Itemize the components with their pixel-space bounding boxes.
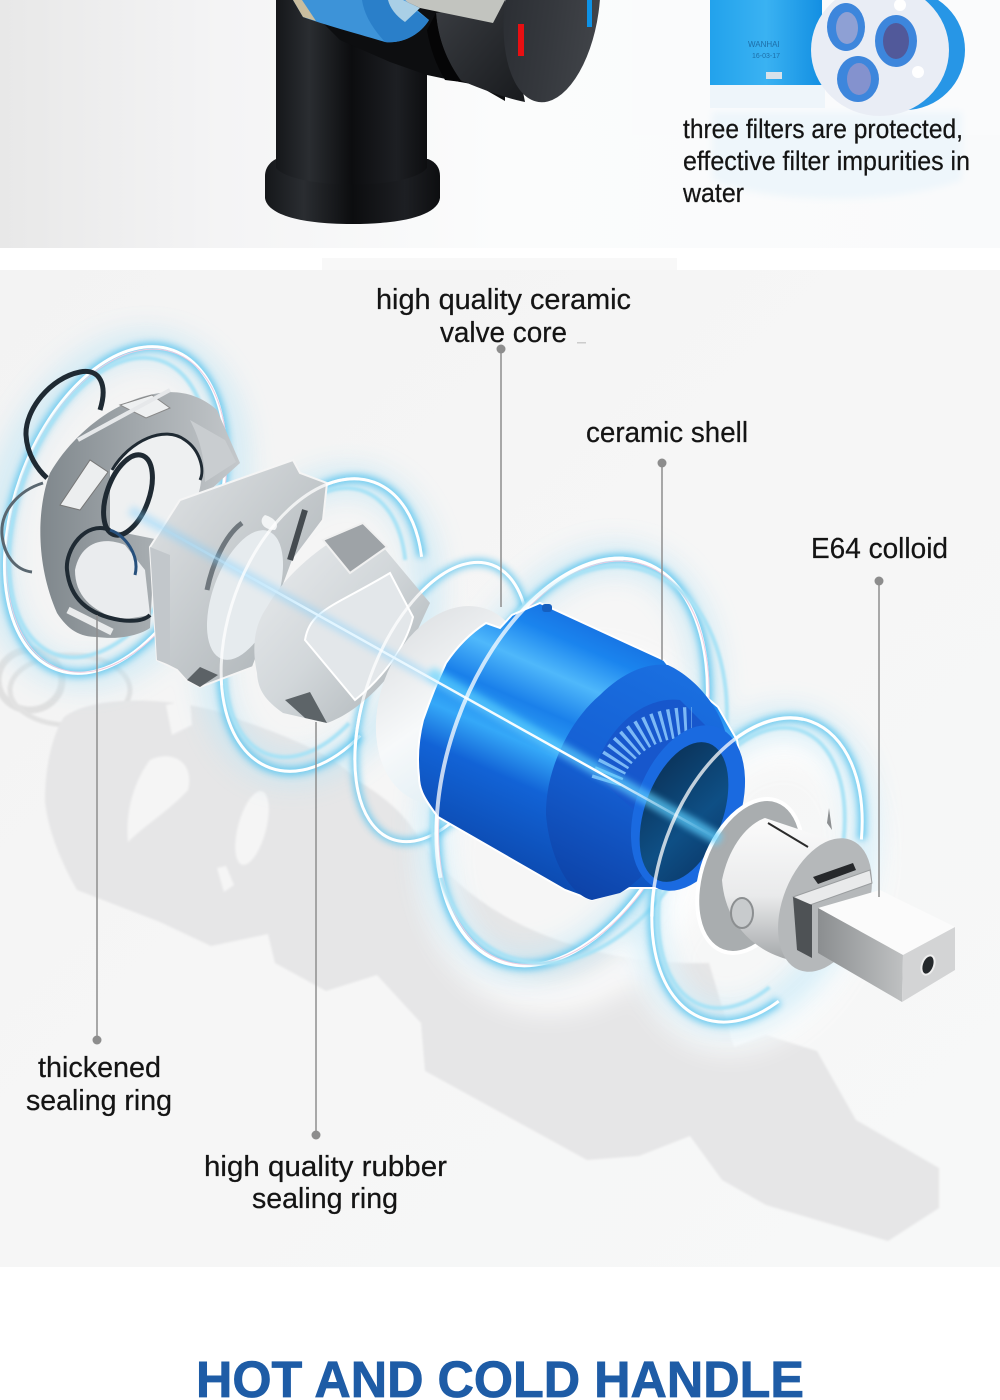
- ring glow behind parts: [0, 316, 901, 1051]
- label: high quality rubber sealing ring: sealing ring: [252, 1183, 398, 1215]
- bore rim: [610, 709, 766, 907]
- label: high quality ceramic valve core: [376, 284, 631, 349]
- column: [276, 0, 427, 184]
- square stem: [818, 890, 955, 955]
- translucent blue cartridge: [293, 0, 429, 42]
- rings in front of parts: [184, 451, 901, 1051]
- base: [265, 159, 440, 224]
- panel: faucet and filter cartridge: [0, 0, 1000, 248]
- shadow of parts: [0, 650, 939, 1241]
- leader: E64 colloid: [874, 576, 884, 897]
- elbow: [300, 0, 505, 101]
- part: slotted plate: [150, 460, 327, 687]
- label: high quality ceramic valve core: high quality ceramic: [376, 284, 631, 316]
- hot marker: [518, 24, 524, 56]
- text: filter description: effective filter impurities in: [683, 146, 970, 176]
- leader: high quality rubber sealing ring: [312, 722, 320, 1140]
- icon: ceramic cartridge with three filter holes: [632, 0, 1000, 199]
- text: filter description: water: [682, 178, 744, 208]
- panel: exploded cartridge diagram: [0, 258, 1000, 1267]
- icon: ceramic cartridge with three filter holes: WANHAI: [748, 40, 780, 49]
- text: filter description: three filters are protected,: [683, 114, 963, 144]
- part: thickened sealing ring holder: [2, 371, 240, 638]
- leader: thickened sealing ring: [92, 615, 102, 1044]
- glow halo around parts: [0, 312, 902, 1050]
- grey core: [403, 0, 505, 23]
- leader: ceramic shell: [658, 458, 666, 660]
- light streak along axis: [130, 510, 720, 840]
- flange face: [546, 665, 728, 900]
- ribbed collar: [594, 700, 715, 815]
- icon: black faucet with hot and cold handle: [265, 0, 612, 224]
- leader: high quality ceramic valve core: [496, 344, 506, 607]
- label: ceramic shell: ceramic shell: [586, 417, 748, 449]
- locating notch: [542, 604, 552, 612]
- label: thickened sealing ring: thickened: [38, 1052, 161, 1084]
- text: filter description: [682, 114, 970, 208]
- part: blue ceramic shell: [418, 603, 766, 907]
- handle disc: [492, 0, 612, 109]
- cold marker: [587, 0, 592, 27]
- white halo around rings: [392, 626, 902, 1065]
- label: thickened sealing ring: sealing ring: [26, 1085, 172, 1117]
- label: high quality rubber sealing ring: [204, 1151, 447, 1215]
- label: high quality ceramic valve core: valve core: [440, 317, 567, 349]
- part: dome cap: [254, 523, 430, 723]
- label: E64 colloid: E64 colloid: [811, 533, 948, 565]
- part: E64 colloid spindle: [678, 784, 955, 1002]
- label: high quality rubber sealing ring: high quality rubber: [204, 1151, 447, 1183]
- bore: [622, 730, 746, 894]
- label: thickened sealing ring: [26, 1052, 172, 1117]
- o-rings: [2, 371, 202, 621]
- hub: [436, 0, 525, 102]
- icon: ceramic cartridge with three filter holes: 16-03-17: [752, 53, 780, 60]
- part: high quality ceramic valve core: [349, 585, 555, 825]
